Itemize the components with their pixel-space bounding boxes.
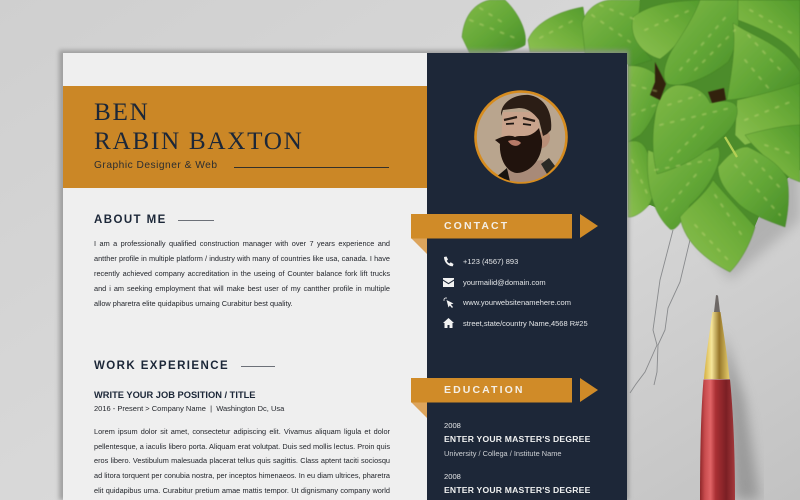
panel: resume dark sidebar [427, 53, 627, 500]
icon: house [443, 318, 454, 328]
ribbon: contact [411, 214, 598, 254]
text block: job description: pellentesque, a iaculis libero porta. Aliquam erat volutpat. Duis sed mollis lectus. Proin quis [94, 442, 390, 451]
text: email: yourmailid@domain.com [463, 278, 546, 287]
title: name: BEN [94, 99, 149, 126]
panel: resume left column [63, 53, 427, 500]
text block: about me: I am a professionally qualified construction manager with over 7 years experience and [94, 239, 390, 248]
text block: job description: elit quidapibus urna. Curabitur pretium amae mattis tempor. Ut dignismany company world [94, 486, 390, 495]
education list [444, 421, 591, 495]
icon: phone [444, 256, 454, 266]
text block: job description: ad litora torquent per conubia nostra, per inceptos himenaeos. In eu diam ultrices, pharetra [94, 471, 390, 480]
plant leaves [462, 0, 800, 272]
job title and meta: WRITE YOUR JOB POSITION / TITLE [94, 390, 256, 400]
education list: 2008 [444, 472, 461, 481]
ribbon: education [411, 378, 598, 418]
pen shadow [722, 330, 760, 500]
text block: about me: and i am seeking employment that will make best user of my cantther profile in multiple [94, 284, 390, 293]
heading: contact: CONTACT [444, 220, 509, 232]
plant underlay [590, 0, 800, 250]
text: phone: +123 (4567) 893 [463, 257, 518, 266]
title: name: RABIN BAXTON [94, 128, 304, 155]
plant soil [650, 62, 726, 103]
cracks in the desk [630, 230, 690, 393]
text block: job description: Lorem ipsum dolor sit amet, consectetur adipiscing elit. Vivamus aliquam ligula et dolor [94, 427, 390, 436]
contact list [443, 256, 588, 328]
job title and meta [94, 390, 284, 413]
leaf stem [725, 137, 737, 157]
text block: about me [94, 239, 390, 308]
portrait photo [474, 90, 568, 184]
heading: about me: ABOUT ME [94, 214, 167, 226]
education list: University / Collega / Institute Name [444, 449, 561, 458]
page shadow [59, 50, 629, 500]
heading: work experience: WORK EXPERIENCE [94, 360, 229, 372]
job title and meta: 2016 - Present > Company Name | Washington Dc, Usa [94, 404, 284, 413]
text: address: street,state/country Name,4568 R#25 [463, 319, 588, 328]
subtitle: role: Graphic Designer & Web [94, 160, 218, 171]
icon: cursor [443, 297, 454, 308]
education list: 2008 [444, 421, 461, 430]
text: website: www.yourwebsitenamehere.com [463, 298, 571, 307]
leaf highlights [470, 5, 795, 262]
text block: about me: recently achieved company accreditation in the useing of Counter balance fork lift trucks [94, 269, 390, 278]
text block: about me: allow pharetra elite quidapibus urnaing Curabitur best quality. [94, 299, 293, 308]
education list: ENTER YOUR MASTER'S DEGREE [444, 485, 591, 495]
text block: job description [94, 427, 390, 495]
panel: name header band [63, 86, 427, 188]
title: name [94, 99, 304, 155]
text block: job description: eros libero. Vestibulum malesuada placerat tellus quis sagittis. Class aptent taciti sociosqu [94, 456, 390, 465]
education list: ENTER YOUR MASTER'S DEGREE [444, 434, 591, 444]
heading: education: EDUCATION [444, 384, 525, 396]
icon: envelope [443, 278, 454, 287]
pen [700, 295, 735, 500]
text block: about me: antther profile in multiple platform / industry with many of countries like usa, canada. I have [94, 254, 390, 263]
plant shadow [640, 100, 800, 280]
